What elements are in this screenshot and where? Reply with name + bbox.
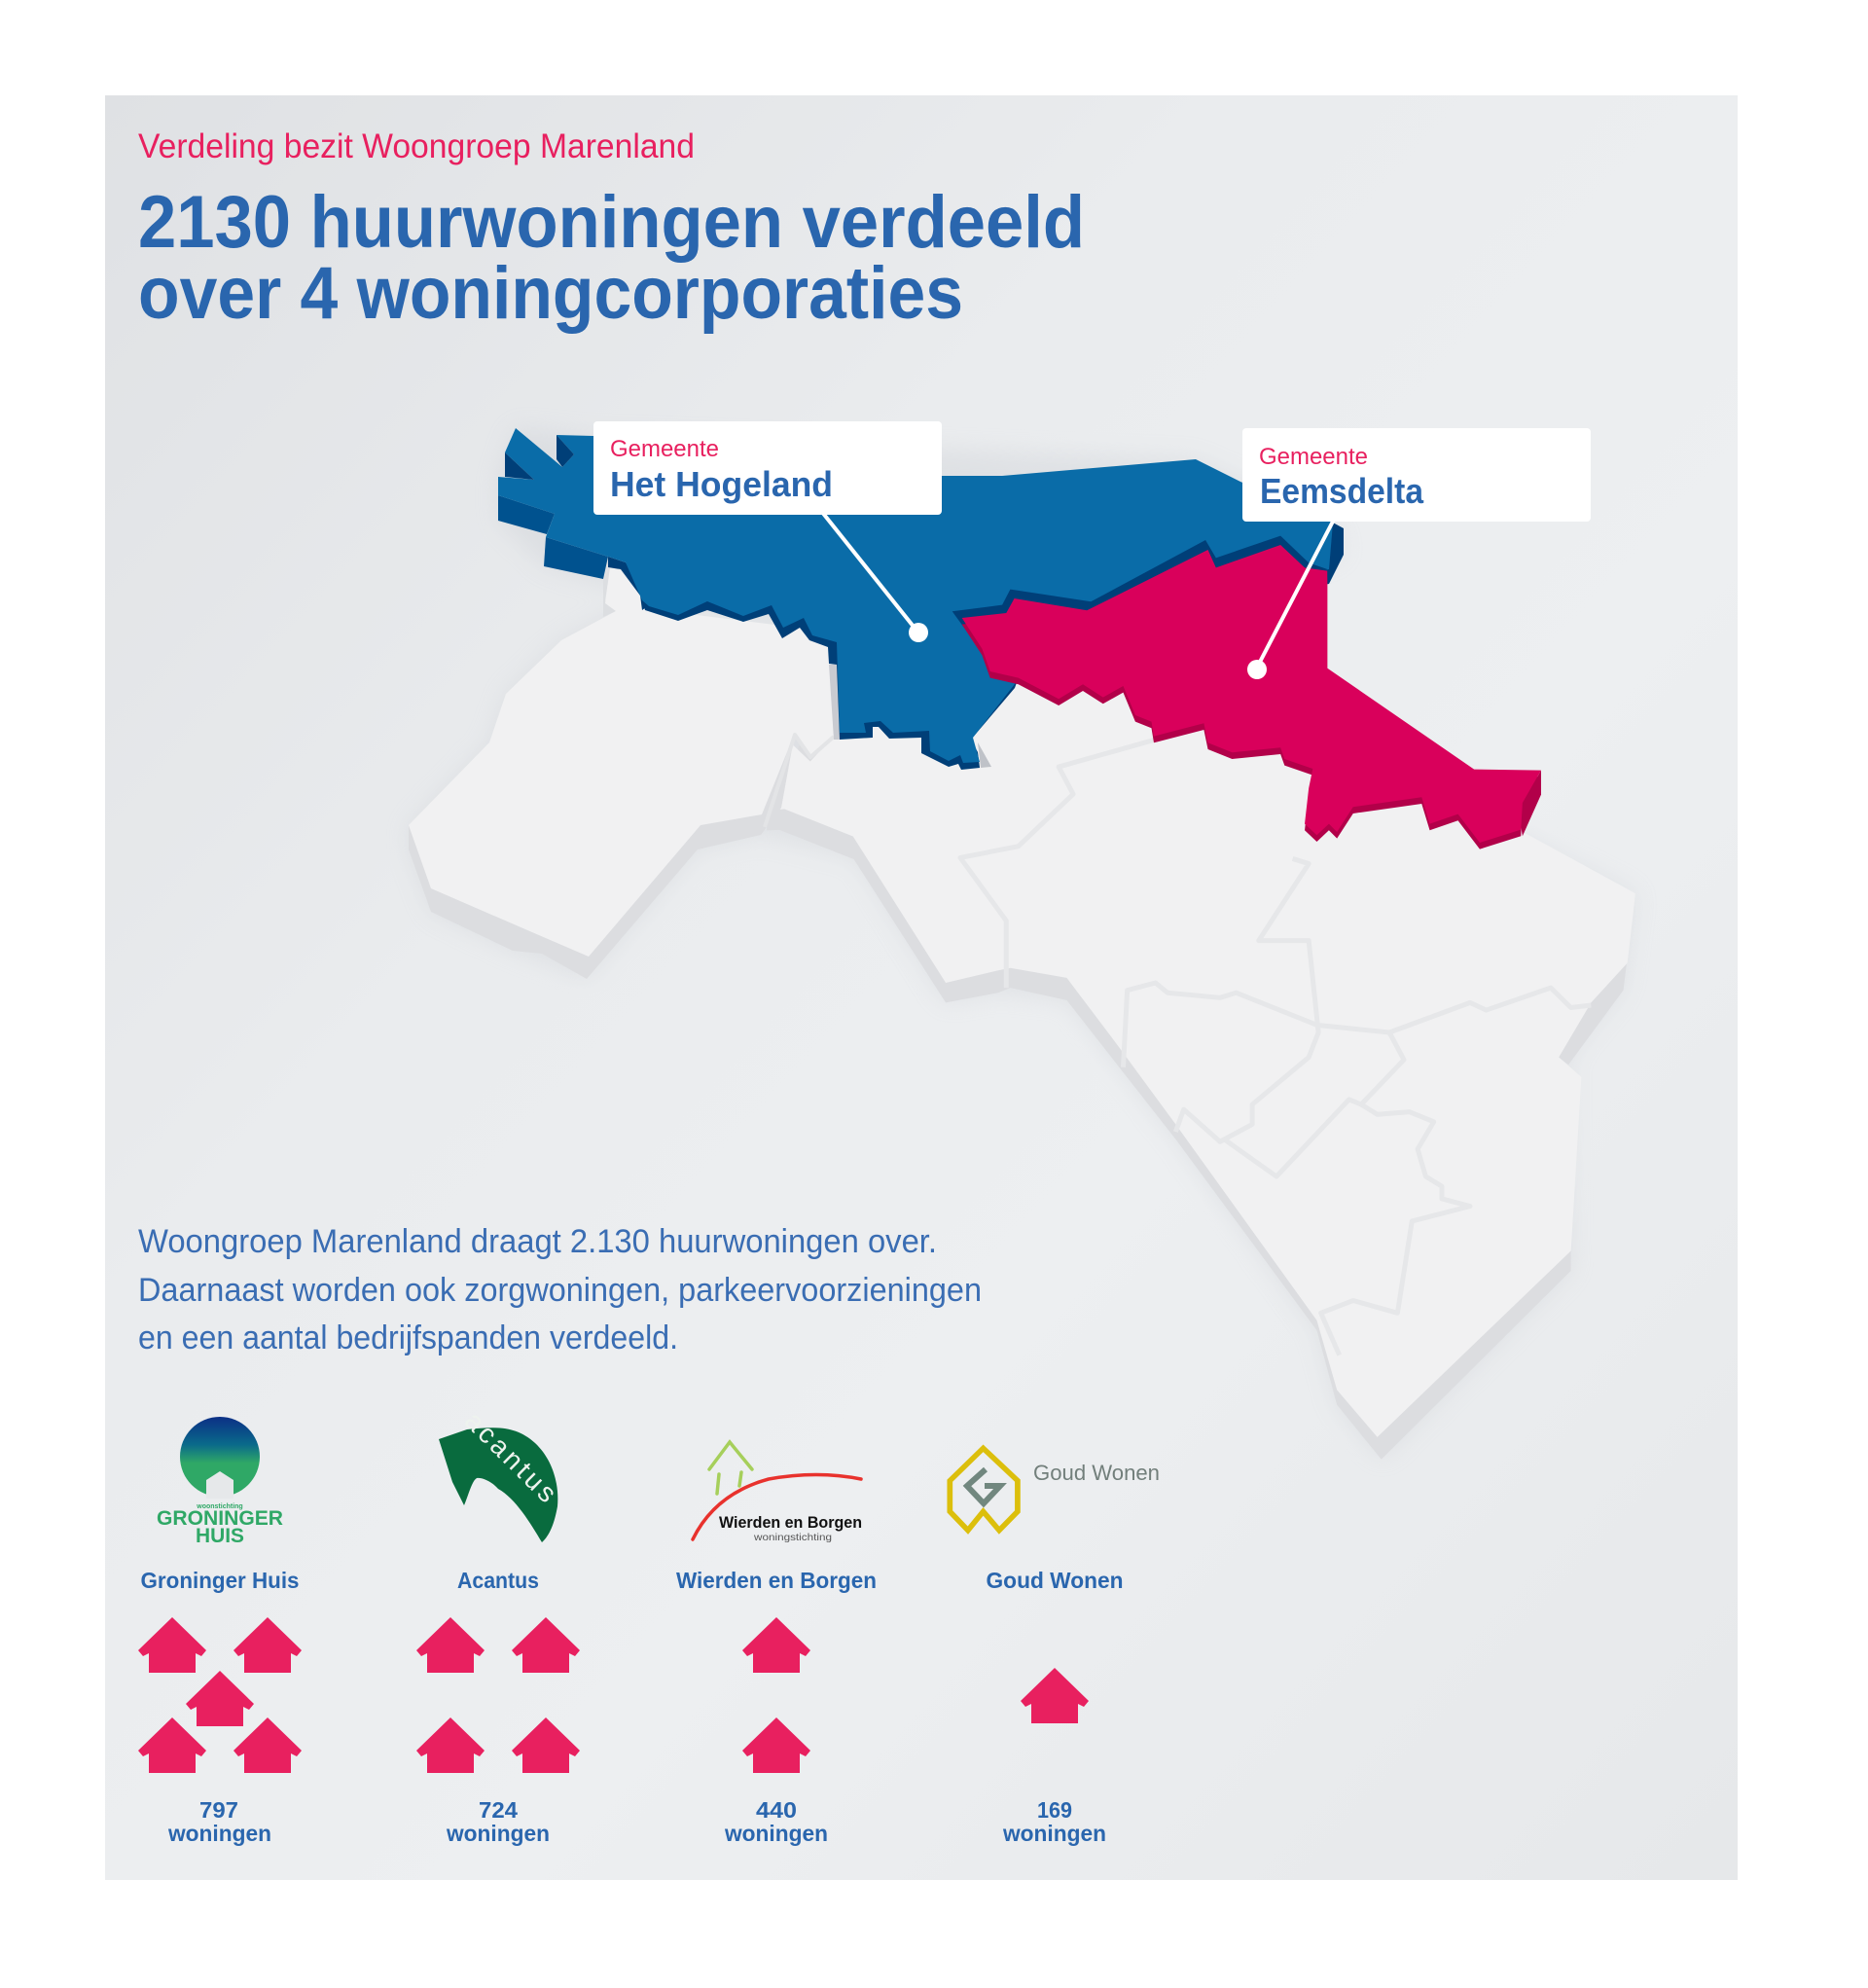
callout: Het Hogeland: Gemeente	[610, 436, 719, 462]
label: Wierden en Borgen: Wierden en Borgen	[676, 1568, 877, 1593]
body text: Daarnaast worden ook zorgwoningen, parkeervoorzieningen	[138, 1272, 982, 1309]
count: Goud Wonen	[1002, 1797, 1106, 1846]
panel: background card	[105, 95, 1738, 1880]
count: Goud Wonen: woningen	[1002, 1821, 1106, 1846]
count: Acantus	[446, 1797, 550, 1846]
count: Acantus: 724	[479, 1797, 518, 1823]
logo: Groninger Huis: woonstichting	[196, 1503, 243, 1510]
callout: Eemsdelta: Gemeente	[1259, 444, 1368, 470]
count: Wierden en Borgen: 440	[756, 1797, 797, 1823]
title: 2130 huurwoningen verdeeld	[138, 181, 1085, 264]
count: Groninger Huis: woningen	[167, 1821, 271, 1846]
icons: houses Acantus	[416, 1617, 580, 1773]
icons: houses Wierden en Borgen	[742, 1617, 810, 1773]
callout: Het Hogeland: Het Hogeland	[610, 464, 833, 504]
title: over 4 woningcorporaties	[138, 252, 963, 335]
label: Groninger Huis: Groninger Huis	[140, 1568, 300, 1593]
title	[138, 181, 1085, 335]
count: Acantus: woningen	[446, 1821, 550, 1846]
map shadow	[409, 428, 1635, 1460]
logo: Groninger Huis: HUIS	[196, 1525, 244, 1547]
count: Goud Wonen: 169	[1037, 1797, 1072, 1823]
logo: Goud Wonen: Goud Wonen	[1033, 1461, 1160, 1485]
body text: Woongroep Marenland draagt 2.130 huurwoningen over.	[138, 1223, 937, 1260]
count: Wierden en Borgen: woningen	[724, 1821, 828, 1846]
map: white west municipality	[409, 567, 991, 979]
map: Het Hogeland (blue)	[498, 428, 1344, 770]
label: Acantus: Acantus	[457, 1568, 539, 1593]
logo: Wierden en Borgen	[693, 1442, 862, 1543]
callout: Eemsdelta	[1242, 428, 1591, 679]
logo: Groninger Huis: GRONINGER	[157, 1507, 283, 1530]
logo: Acantus: acantus	[471, 1428, 553, 1502]
label: Goud Wonen: Goud Wonen	[987, 1568, 1123, 1593]
map: municipalities of Groningen	[409, 428, 1635, 1460]
body text	[138, 1223, 982, 1356]
count: Wierden en Borgen	[724, 1797, 828, 1846]
map: Eemsdelta (pink)	[952, 536, 1541, 849]
logo: Goud Wonen	[950, 1448, 1160, 1531]
logo: Wierden en Borgen: woningstichting	[753, 1533, 832, 1543]
count: Groninger Huis: 797	[199, 1797, 238, 1823]
count: Groninger Huis	[167, 1797, 271, 1846]
subtitle: Verdeling bezit Woongroep Marenland	[138, 127, 695, 165]
logo: Groninger Huis	[157, 1417, 283, 1547]
logo: Acantus	[439, 1428, 558, 1542]
logo: Wierden en Borgen: Wierden en Borgen	[719, 1513, 862, 1532]
body text: en een aantal bedrijfspanden verdeeld.	[138, 1319, 678, 1356]
map: white centre and east municipalities	[767, 591, 1635, 1460]
icon: house Goud Wonen	[1021, 1668, 1089, 1723]
callout: Het Hogeland	[593, 421, 942, 642]
icons: houses Groninger Huis	[138, 1617, 302, 1773]
callout: Eemsdelta: Eemsdelta	[1260, 471, 1424, 511]
